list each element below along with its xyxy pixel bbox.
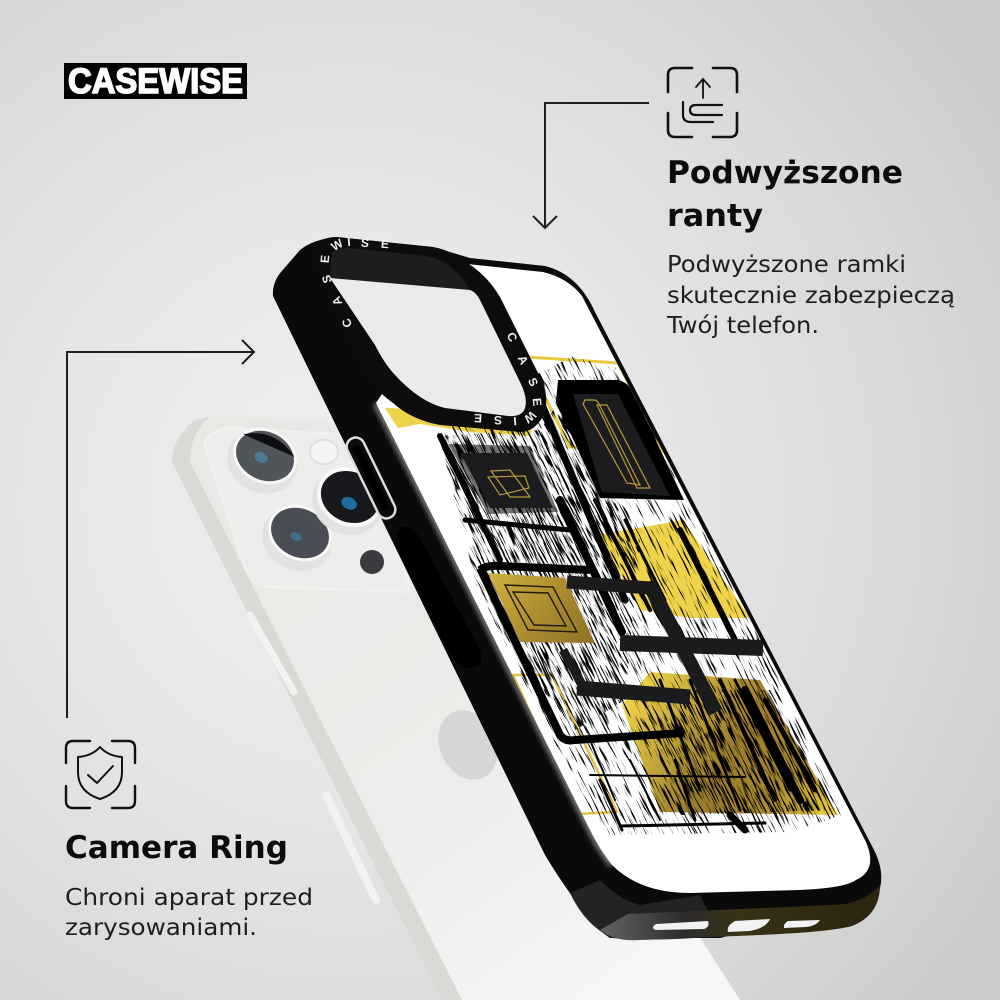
- icon: shield: [66, 741, 135, 808]
- text: raised edges description: Twój telefon.: [666, 313, 819, 339]
- case bottom translucent corner: [570, 880, 720, 940]
- ring lettering: S: [319, 273, 335, 285]
- dark square top right: [556, 380, 684, 500]
- case: [273, 235, 897, 940]
- heading: raised edges: ranty: [667, 198, 763, 234]
- streaks: [440, 400, 815, 830]
- ring lettering: E: [530, 397, 544, 407]
- heading: raised edges: Podwyższone: [667, 155, 903, 191]
- black frame outline: [480, 566, 683, 740]
- ring lettering: [318, 235, 544, 428]
- camera ring: [312, 237, 546, 432]
- text: camera ring description: Chroni aparat przed: [65, 885, 313, 911]
- phone side button lower: [326, 795, 376, 900]
- case side slot: [397, 527, 482, 668]
- yellow outline upper frame: [527, 357, 664, 453]
- gold outline frame: [513, 675, 617, 814]
- white phone: [172, 416, 740, 1000]
- gold patch upper: [598, 520, 750, 618]
- ring lettering: C: [504, 330, 520, 344]
- heading: camera ring: Camera Ring: [65, 830, 288, 866]
- heading: raised edges: [667, 155, 903, 234]
- text: camera ring description: [65, 885, 313, 941]
- port hole right: [784, 920, 820, 928]
- flash: [310, 440, 338, 464]
- port hole left: [653, 921, 708, 930]
- dark bars: [563, 582, 763, 712]
- text: camera ring description: zarysowaniami.: [65, 915, 257, 941]
- phone body: [172, 416, 740, 1000]
- ring lettering: A: [515, 353, 531, 367]
- gold line icon in dark square: [583, 400, 650, 488]
- dark square middle: [448, 444, 558, 514]
- ring lettering: E: [380, 237, 390, 251]
- camera plateau: [204, 428, 410, 592]
- ring lettering: E: [474, 411, 482, 425]
- arrow: top callout: [533, 103, 649, 228]
- gold line icon in middle square: [488, 470, 530, 497]
- ring lettering: S: [494, 413, 502, 427]
- grunge texture: [442, 356, 841, 835]
- ring lettering: W: [521, 408, 539, 426]
- logo: CASEWISE: [68, 62, 243, 101]
- sensor: [360, 550, 384, 574]
- ring lettering: I: [347, 235, 351, 249]
- ring lettering: A: [329, 294, 345, 308]
- text: raised edges description: skutecznie zabezpieczą: [667, 283, 955, 309]
- gold patch lower: [622, 672, 838, 815]
- icon: raised edges: [668, 68, 737, 137]
- gold smear under camera ring: [385, 408, 535, 436]
- camera window: [330, 278, 526, 416]
- apple logo: [427, 701, 509, 789]
- ring lettering: W: [329, 236, 346, 254]
- case inner edge glow: [376, 403, 612, 865]
- gold square: [488, 573, 595, 643]
- phone side button upper: [250, 615, 294, 692]
- port hole middle: [728, 919, 770, 932]
- grunge texture dense: [440, 404, 834, 815]
- case button: [344, 435, 398, 521]
- lens 2: [301, 455, 395, 547]
- text: raised edges description: Podwyższone ramki: [667, 252, 906, 278]
- case black side and shell: [273, 237, 881, 938]
- text: raised edges description: [666, 252, 955, 339]
- case back white panel: [376, 264, 870, 893]
- ring lettering: E: [318, 254, 332, 264]
- ring lettering: C: [339, 316, 355, 330]
- ring lettering: S: [525, 375, 541, 389]
- ring lettering: I: [513, 414, 517, 428]
- inner camera wall: [330, 248, 470, 290]
- phone side rim: [172, 417, 462, 1000]
- lens 1: [216, 416, 309, 505]
- arrow: left callout: [67, 340, 254, 718]
- lens 3: [251, 493, 344, 583]
- artwork: [385, 356, 841, 835]
- case bottom port face: [600, 885, 880, 940]
- ring lettering: S: [360, 236, 370, 250]
- square linework: [505, 585, 577, 632]
